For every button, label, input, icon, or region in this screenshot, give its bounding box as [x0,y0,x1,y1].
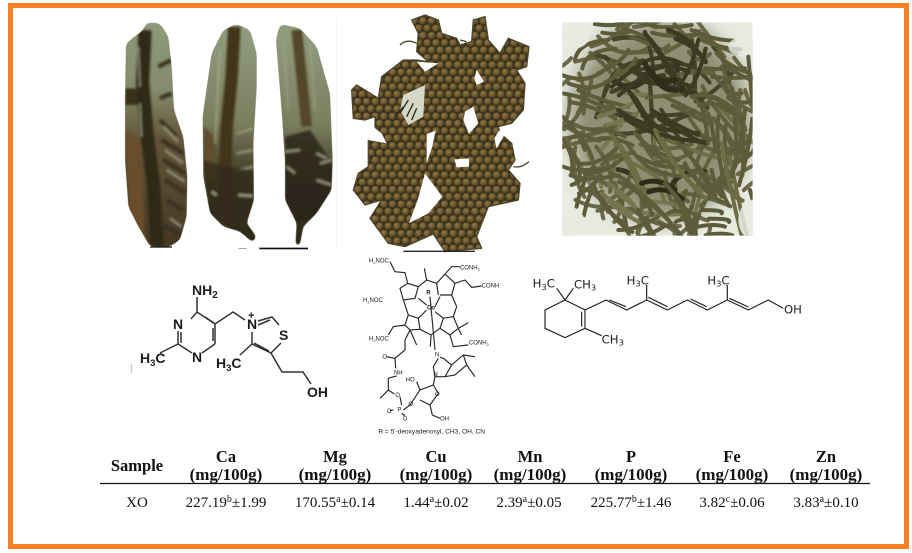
structure: cobalamin: 2 [373,338,376,343]
table: mineral composition [100,447,870,511]
structure: thiamine: C [155,350,166,366]
structure: cobalamin: R = 5'-deoxyadenosyl, CH3, OH, CN [378,430,485,436]
table header: (mg/100g) [696,465,768,484]
structure: retinol: 3 [591,283,596,293]
table row: XO: 225.77 [591,495,632,511]
table row: XO: a [430,494,435,505]
structure: thiamine: C [231,355,242,371]
structure: cobalamin: O [435,392,440,398]
structure: cobalamin: N [435,353,439,359]
structure: retinol: H [707,273,716,287]
table header: Ca [216,447,236,466]
structure: cobalamin: O [403,416,408,422]
table row: XO: a [523,494,528,505]
table header: (mg/100g) [790,465,862,484]
structure: thiamine: OH [307,384,328,400]
structure: cobalamin: NOC [376,337,390,343]
table row: XO: a [336,494,341,505]
structure: thiamine: H [216,355,226,371]
leaf 2 [203,24,257,243]
structure: thiamine: + [248,310,254,322]
structure: thiamine: 3 [226,363,231,374]
structure: retinol: H [627,273,635,287]
structure: cobalamin: P [397,407,401,413]
table row: XO: b [227,494,232,505]
structure: retinol: OH [784,303,802,317]
structure: retinol: CH [602,332,619,346]
table header: (mg/100g) [494,465,566,484]
leaf 1 [125,22,187,247]
structure: cobalamin: H [363,298,367,304]
structure: cobalamin: NOC [370,298,384,304]
table header: Mg [323,447,348,466]
table header: (mg/100g) [400,465,472,484]
structure: thiamine: N [192,349,202,365]
structure: cobalamin: CONH [469,341,487,347]
structure: retinol: 3 [635,279,641,289]
leaf stalk smudges [150,246,308,249]
table row: XO: ±0.14 [341,495,376,511]
structure: cobalamin: 2 [478,267,481,272]
table row: XO: XO [126,495,148,511]
structure: retinol: CH [574,277,591,291]
structure: cobalamin: 2 [373,260,376,265]
table header: P [626,447,636,466]
structure: cobalamin: NOC [376,259,390,265]
structure: cobalamin: H [369,337,373,343]
table row: XO: 3.83 [793,495,820,511]
gaps between seed clusters [368,62,506,223]
table header: Cu [425,447,447,466]
table header: Mn [518,447,542,466]
table row: XO [126,494,859,511]
structure: thiamine: N [247,316,257,332]
structure: cobalamin: O [382,355,387,361]
structure: cobalamin: 2 [367,299,370,304]
structure: cobalamin: R [426,291,431,297]
structure: retinol: 3 [716,279,721,289]
structure: thiamine: N [173,316,183,332]
table header: Fe [723,447,741,466]
structure: thiamine: H [140,350,150,366]
photo: seed clusters [352,15,529,252]
structure: cobalamin: Co [427,305,435,311]
table header [111,447,862,484]
structure: cobalamin: N [433,372,438,378]
structure: cobalamin: OH [440,417,449,423]
table row: XO: ±0.06 [730,495,765,511]
table row: XO: ±0.10 [824,495,859,511]
table row: XO: ±1.46 [637,495,672,511]
structure: thiamine: S [279,327,288,343]
structure: cobalamin: CONH [482,284,499,290]
table header: (mg/100g) [190,465,262,484]
structure: retinol: 3 [541,282,547,292]
structure: cobalamin: 2 [487,342,490,347]
leaf 3 [276,24,333,247]
table header: Sample [111,456,163,475]
structure: retinol: C [721,273,730,287]
structure: thiamine: 3 [150,358,155,369]
structure: thiamine: 2 [212,290,218,301]
structure: thiamine [132,282,328,400]
structure: cobalamin: O [387,409,392,415]
table row: XO: 1.44 [403,495,430,511]
structure: retinol: C [641,273,649,287]
table row: XO: ±0.02 [434,495,469,511]
table row: XO: b [632,494,637,505]
table row: XO: ±1.99 [232,495,266,511]
table header: (mg/100g) [299,465,371,484]
table row: XO: a [820,494,825,505]
structure: retinol: 3 [619,338,624,348]
table row: XO: c [726,494,731,505]
structure: cobalamin: NH [394,371,403,377]
structure: thiamine: NH [192,282,212,298]
structure: cobalamin: CONH [460,265,478,271]
structure: cobalamin [363,259,499,436]
structure: cobalamin: H [369,259,373,265]
table header: (mg/100g) [595,465,667,484]
table row: XO: ±0.05 [527,495,562,511]
table row: XO: 227.19 [186,495,227,511]
table row: XO: 170.55 [295,495,336,511]
structure: retinol: C [547,277,555,291]
table header: Zn [816,447,836,466]
structure: retinol [533,273,802,348]
structure: cobalamin: O [408,402,413,408]
structure: retinol: H [533,277,541,291]
structure: cobalamin: O [395,393,400,399]
photo: dried tea shoots [562,22,753,236]
structure: cobalamin: HO [406,377,415,383]
table row: XO: 3.82 [699,495,726,511]
photo: dried leaves [125,20,336,249]
table row: XO: 2.39 [496,495,523,511]
